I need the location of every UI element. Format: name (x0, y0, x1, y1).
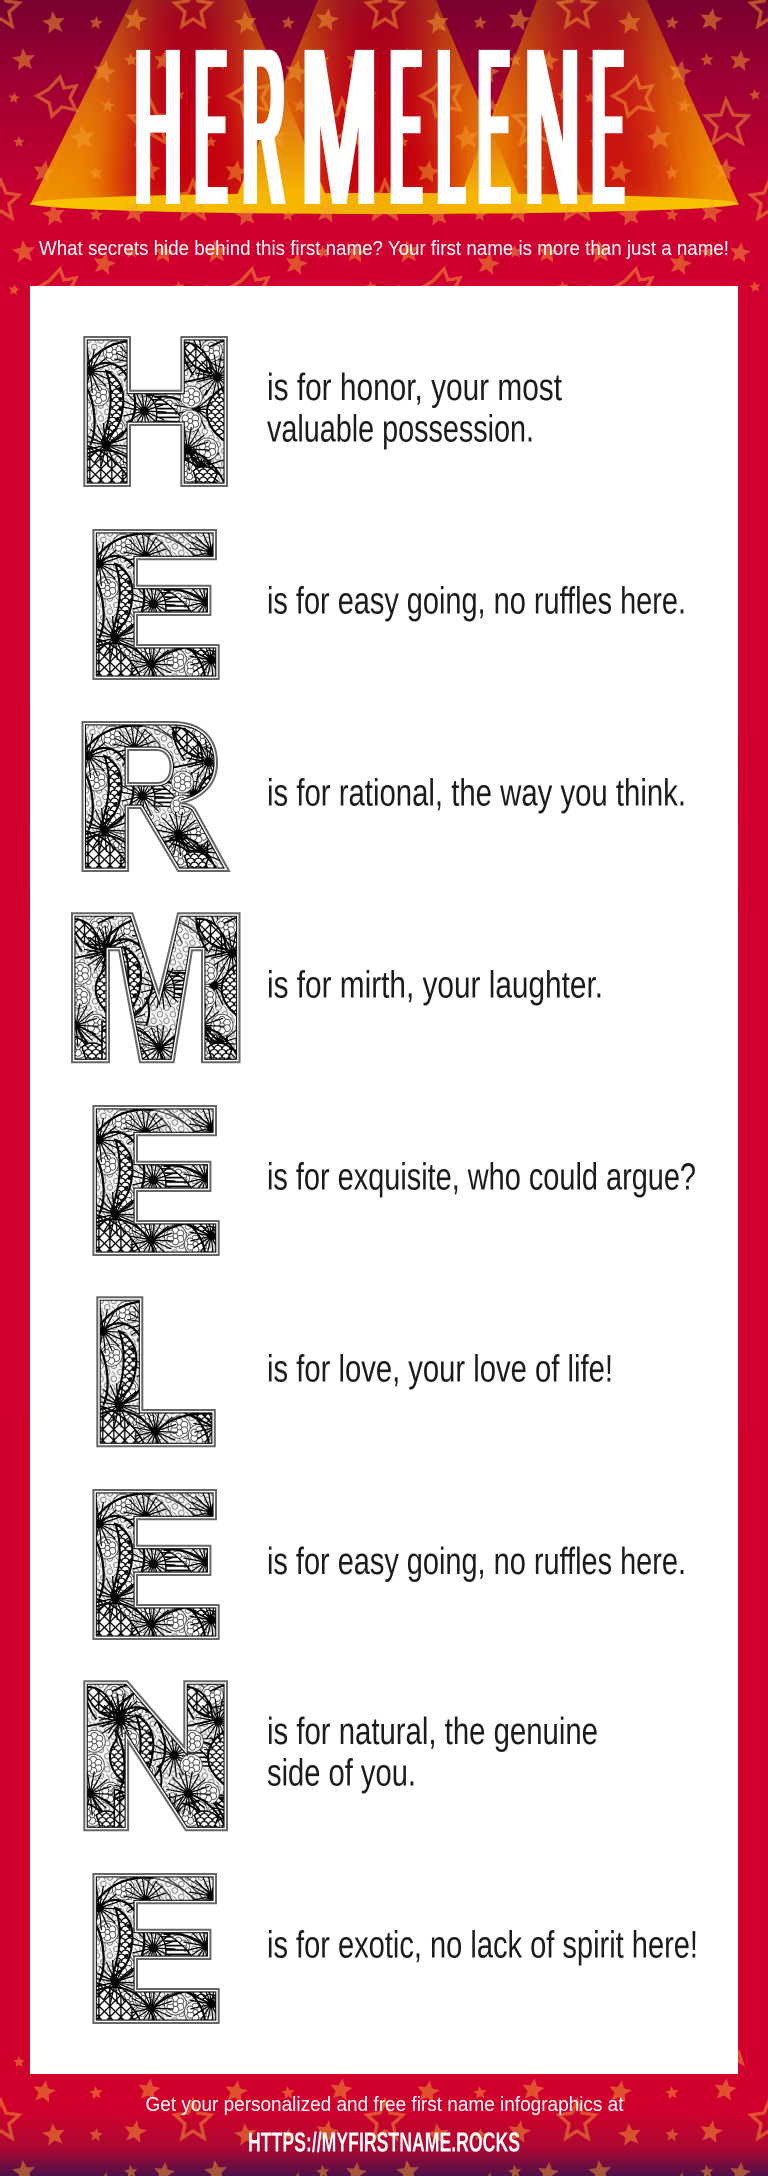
title (135, 2, 625, 252)
title: N (525, 2, 580, 252)
icon: zentangle letter M (71, 912, 240, 1064)
header star pattern (0, 0, 768, 300)
panel: white card (30, 286, 738, 2074)
footer star pattern (0, 2050, 768, 2176)
text: H line: valuable possession. (267, 409, 534, 451)
title: E (593, 2, 623, 252)
text: N line: is for natural, the genuine (267, 1711, 598, 1753)
middle cone (238, 0, 479, 194)
title: E (391, 2, 421, 252)
right cone (492, 0, 739, 205)
spotlight cones (30, 0, 739, 205)
text: N line (267, 1711, 598, 1795)
text: L line: is for love, your love of life! (267, 1349, 613, 1391)
cone overlap left (238, 98, 326, 194)
icon: zentangle letter H (83, 336, 228, 487)
icon: zentangle letter E (92, 529, 220, 680)
text: H line: is for honor, your most (267, 367, 562, 409)
subtitle: What secrets hide behind this first name? Your first name is more than just a name! (39, 238, 729, 260)
title: R (243, 2, 284, 252)
icon: zentangle letter L (96, 1296, 216, 1448)
title: E (196, 2, 226, 252)
text: M line: is for mirth, your laughter. (267, 964, 603, 1006)
title: L (438, 2, 464, 252)
cone overlap right (464, 142, 518, 194)
footer text: Get your personalized and free first name infographics at (146, 2094, 624, 2116)
title: E (479, 2, 509, 252)
text: N line: side of you. (267, 1753, 416, 1795)
title: H (135, 2, 181, 252)
icon: zentangle letter N (83, 1680, 228, 1832)
title: M (301, 2, 378, 252)
spotlight floor ellipse (30, 193, 738, 214)
icon: zentangle letter E (92, 1105, 220, 1256)
text: H line (267, 367, 562, 451)
icon: zentangle letter E (92, 1873, 220, 2024)
icon: zentangle letter E (92, 1489, 220, 1640)
left cone (30, 0, 271, 205)
icon: zentangle letter R (82, 721, 231, 872)
footer url: HTTPS://MYFIRSTNAME.ROCKS (248, 2127, 520, 2158)
